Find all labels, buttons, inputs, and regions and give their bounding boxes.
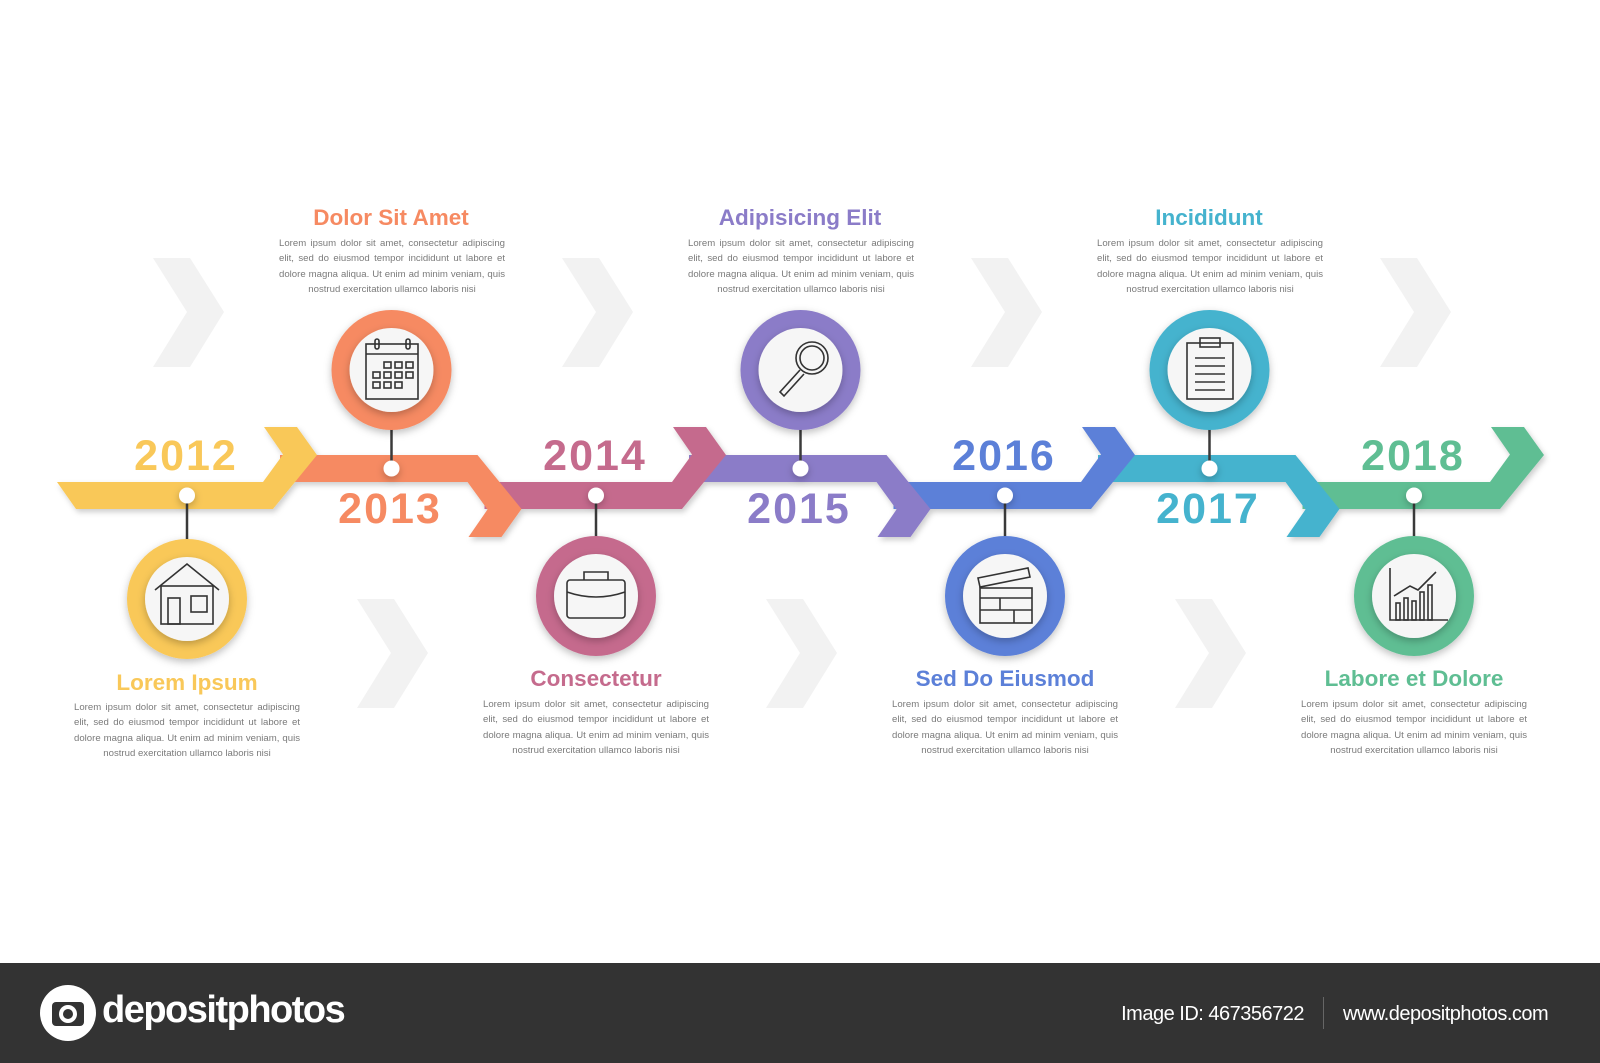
footer: [0, 963, 1600, 1063]
title: Consectetur: Consectetur: [530, 666, 662, 691]
logo: depositphotos: [102, 989, 344, 1031]
title: Adipisicing Elit: Adipisicing Elit: [719, 205, 881, 230]
icon: camera logo: [40, 985, 96, 1041]
logo: [40, 985, 344, 1041]
text: Lorem Ipsum body: Lorem ipsum dolor sit amet, consectetur adipiscing elit, sed do eiusmod tempor incididunt ut labore et dolore magna aliqua. Ut enim ad minim veniam, quis nostrud exercitation ullamco laboris nisi: [74, 702, 300, 759]
image id: Image ID: 467356722: [1121, 1003, 1304, 1025]
text: Sed Do Eiusmod body: Lorem ipsum dolor sit amet, consectetur adipiscing elit, sed do eiusmod tempor incididunt ut labore et dolore magna aliqua. Ut enim ad minim veniam, quis nostrud exercitation ullamco laboris nisi: [892, 699, 1118, 756]
title: Sed Do Eiusmod: Sed Do Eiusmod: [916, 666, 1094, 691]
dots: [179, 460, 1422, 504]
years: 2017: [1156, 485, 1260, 533]
url: www.depositphotos.com: [1343, 1003, 1548, 1025]
text: Dolor Sit Amet body: Lorem ipsum dolor sit amet, consectetur adipiscing elit, sed do eiusmod tempor incididunt ut labore et dolore magna aliqua. Ut enim ad minim veniam, quis nostrud exercitation ullamco laboris nisi: [279, 238, 505, 295]
years: 2018: [1361, 432, 1465, 480]
years: 2016: [952, 432, 1056, 480]
years: 2013: [338, 485, 442, 533]
years: [134, 432, 1465, 533]
text: Adipisicing Elit body: Lorem ipsum dolor sit amet, consectetur adipiscing elit, sed do eiusmod tempor incididunt ut labore et dolore magna aliqua. Ut enim ad minim veniam, quis nostrud exercitation ullamco laboris nisi: [688, 238, 914, 295]
connectors: [187, 420, 1414, 545]
years: 2014: [543, 432, 647, 480]
years: 2012: [134, 432, 238, 480]
text: Consectetur body: Lorem ipsum dolor sit amet, consectetur adipiscing elit, sed do eiusmod tempor incididunt ut labore et dolore magna aliqua. Ut enim ad minim veniam, quis nostrud exercitation ullamco laboris nisi: [483, 699, 709, 756]
years: 2015: [747, 485, 851, 533]
title: Labore et Dolore: Labore et Dolore: [1325, 666, 1503, 691]
text: Incididunt body: Lorem ipsum dolor sit amet, consectetur adipiscing elit, sed do eiusmod tempor incididunt ut labore et dolore magna aliqua. Ut enim ad minim veniam, quis nostrud exercitation ullamco laboris nisi: [1097, 238, 1323, 295]
icon: house: [155, 564, 219, 624]
icon: briefcase: [567, 572, 625, 618]
icon: magnifier: [780, 342, 828, 396]
text: Labore et Dolore body: Lorem ipsum dolor sit amet, consectetur adipiscing elit, sed do eiusmod tempor incididunt ut labore et dolore magna aliqua. Ut enim ad minim veniam, quis nostrud exercitation ullamco laboris nisi: [1301, 699, 1527, 756]
title: Incididunt: Incididunt: [1155, 205, 1263, 230]
icon: chart: [1390, 568, 1448, 620]
icon circles: [127, 310, 1474, 659]
icon: clapperboard: [978, 568, 1032, 623]
title: Lorem Ipsum: Lorem Ipsum: [116, 670, 258, 695]
title: Dolor Sit Amet: Dolor Sit Amet: [313, 205, 469, 230]
icon: calendar: [366, 339, 418, 399]
icon: clipboard: [1187, 338, 1233, 399]
